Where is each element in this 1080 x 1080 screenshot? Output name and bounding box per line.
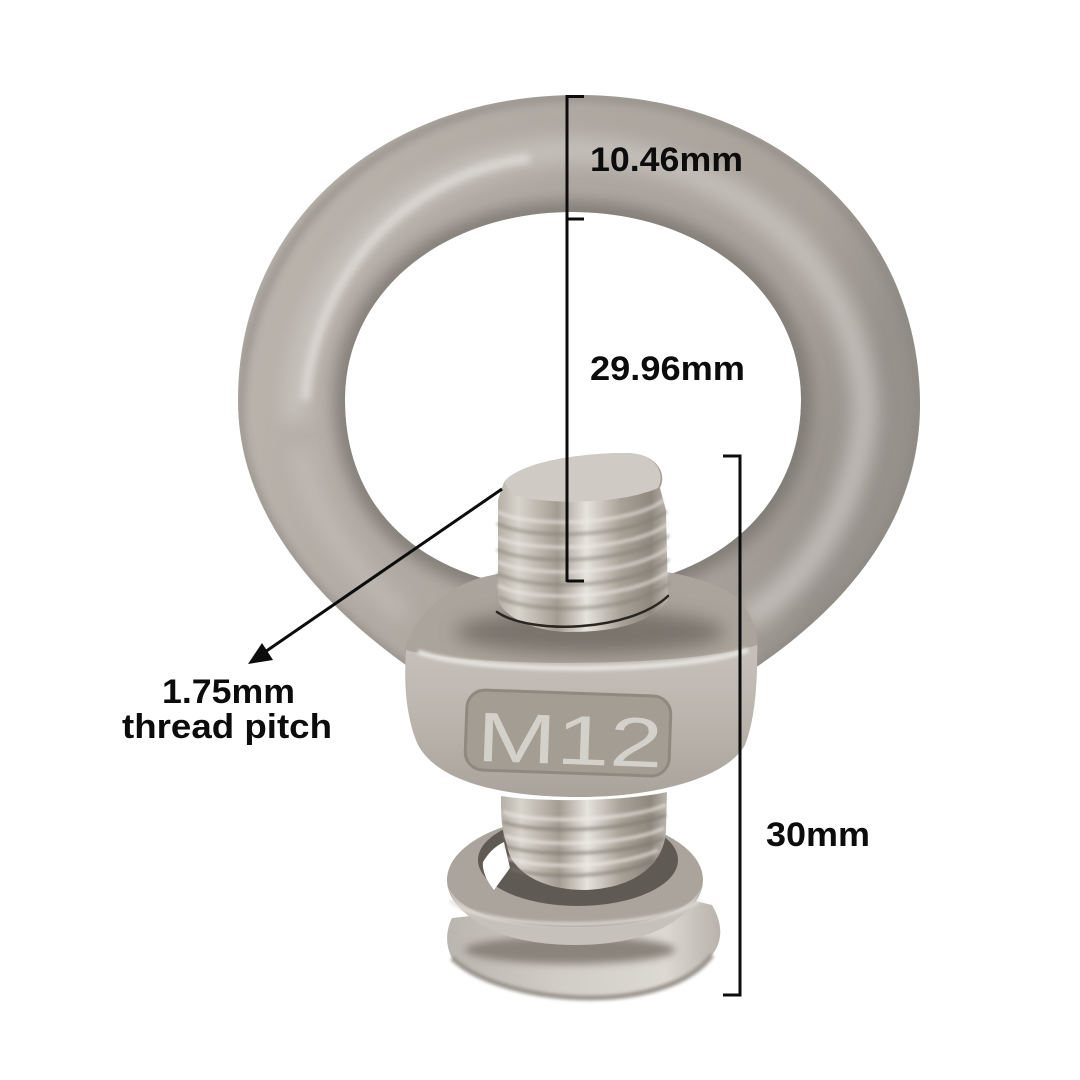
dimension line: ring thickness and inner diameter [567,95,584,582]
flange washer [447,895,720,998]
dimension bracket: 30mm thread length [723,456,740,995]
callout: thread pitch [122,673,332,746]
arrow: thread pitch pointer [248,489,502,664]
ring of the eye bolt [238,95,920,668]
spring lock washer [447,814,703,945]
eye bolt product photo [238,95,920,998]
dimension label: 30mm: 30mm [766,816,870,854]
washer body [447,816,703,944]
M12 stamped marking [464,689,671,783]
lower threaded stud [501,792,667,890]
upper threaded stud [497,453,668,632]
washer opening [478,814,678,906]
dimension label: 10.46mm: 10.46mm [590,141,743,179]
callout: thread pitch: thread pitch [122,708,332,746]
collar body with M12 stamp [405,645,757,797]
dimension label: 29.96mm: 29.96mm [590,350,745,388]
M12 stamped marking: M12 [475,698,664,782]
callout: thread pitch: 1.75mm [162,673,295,711]
collar top surface [405,566,758,668]
